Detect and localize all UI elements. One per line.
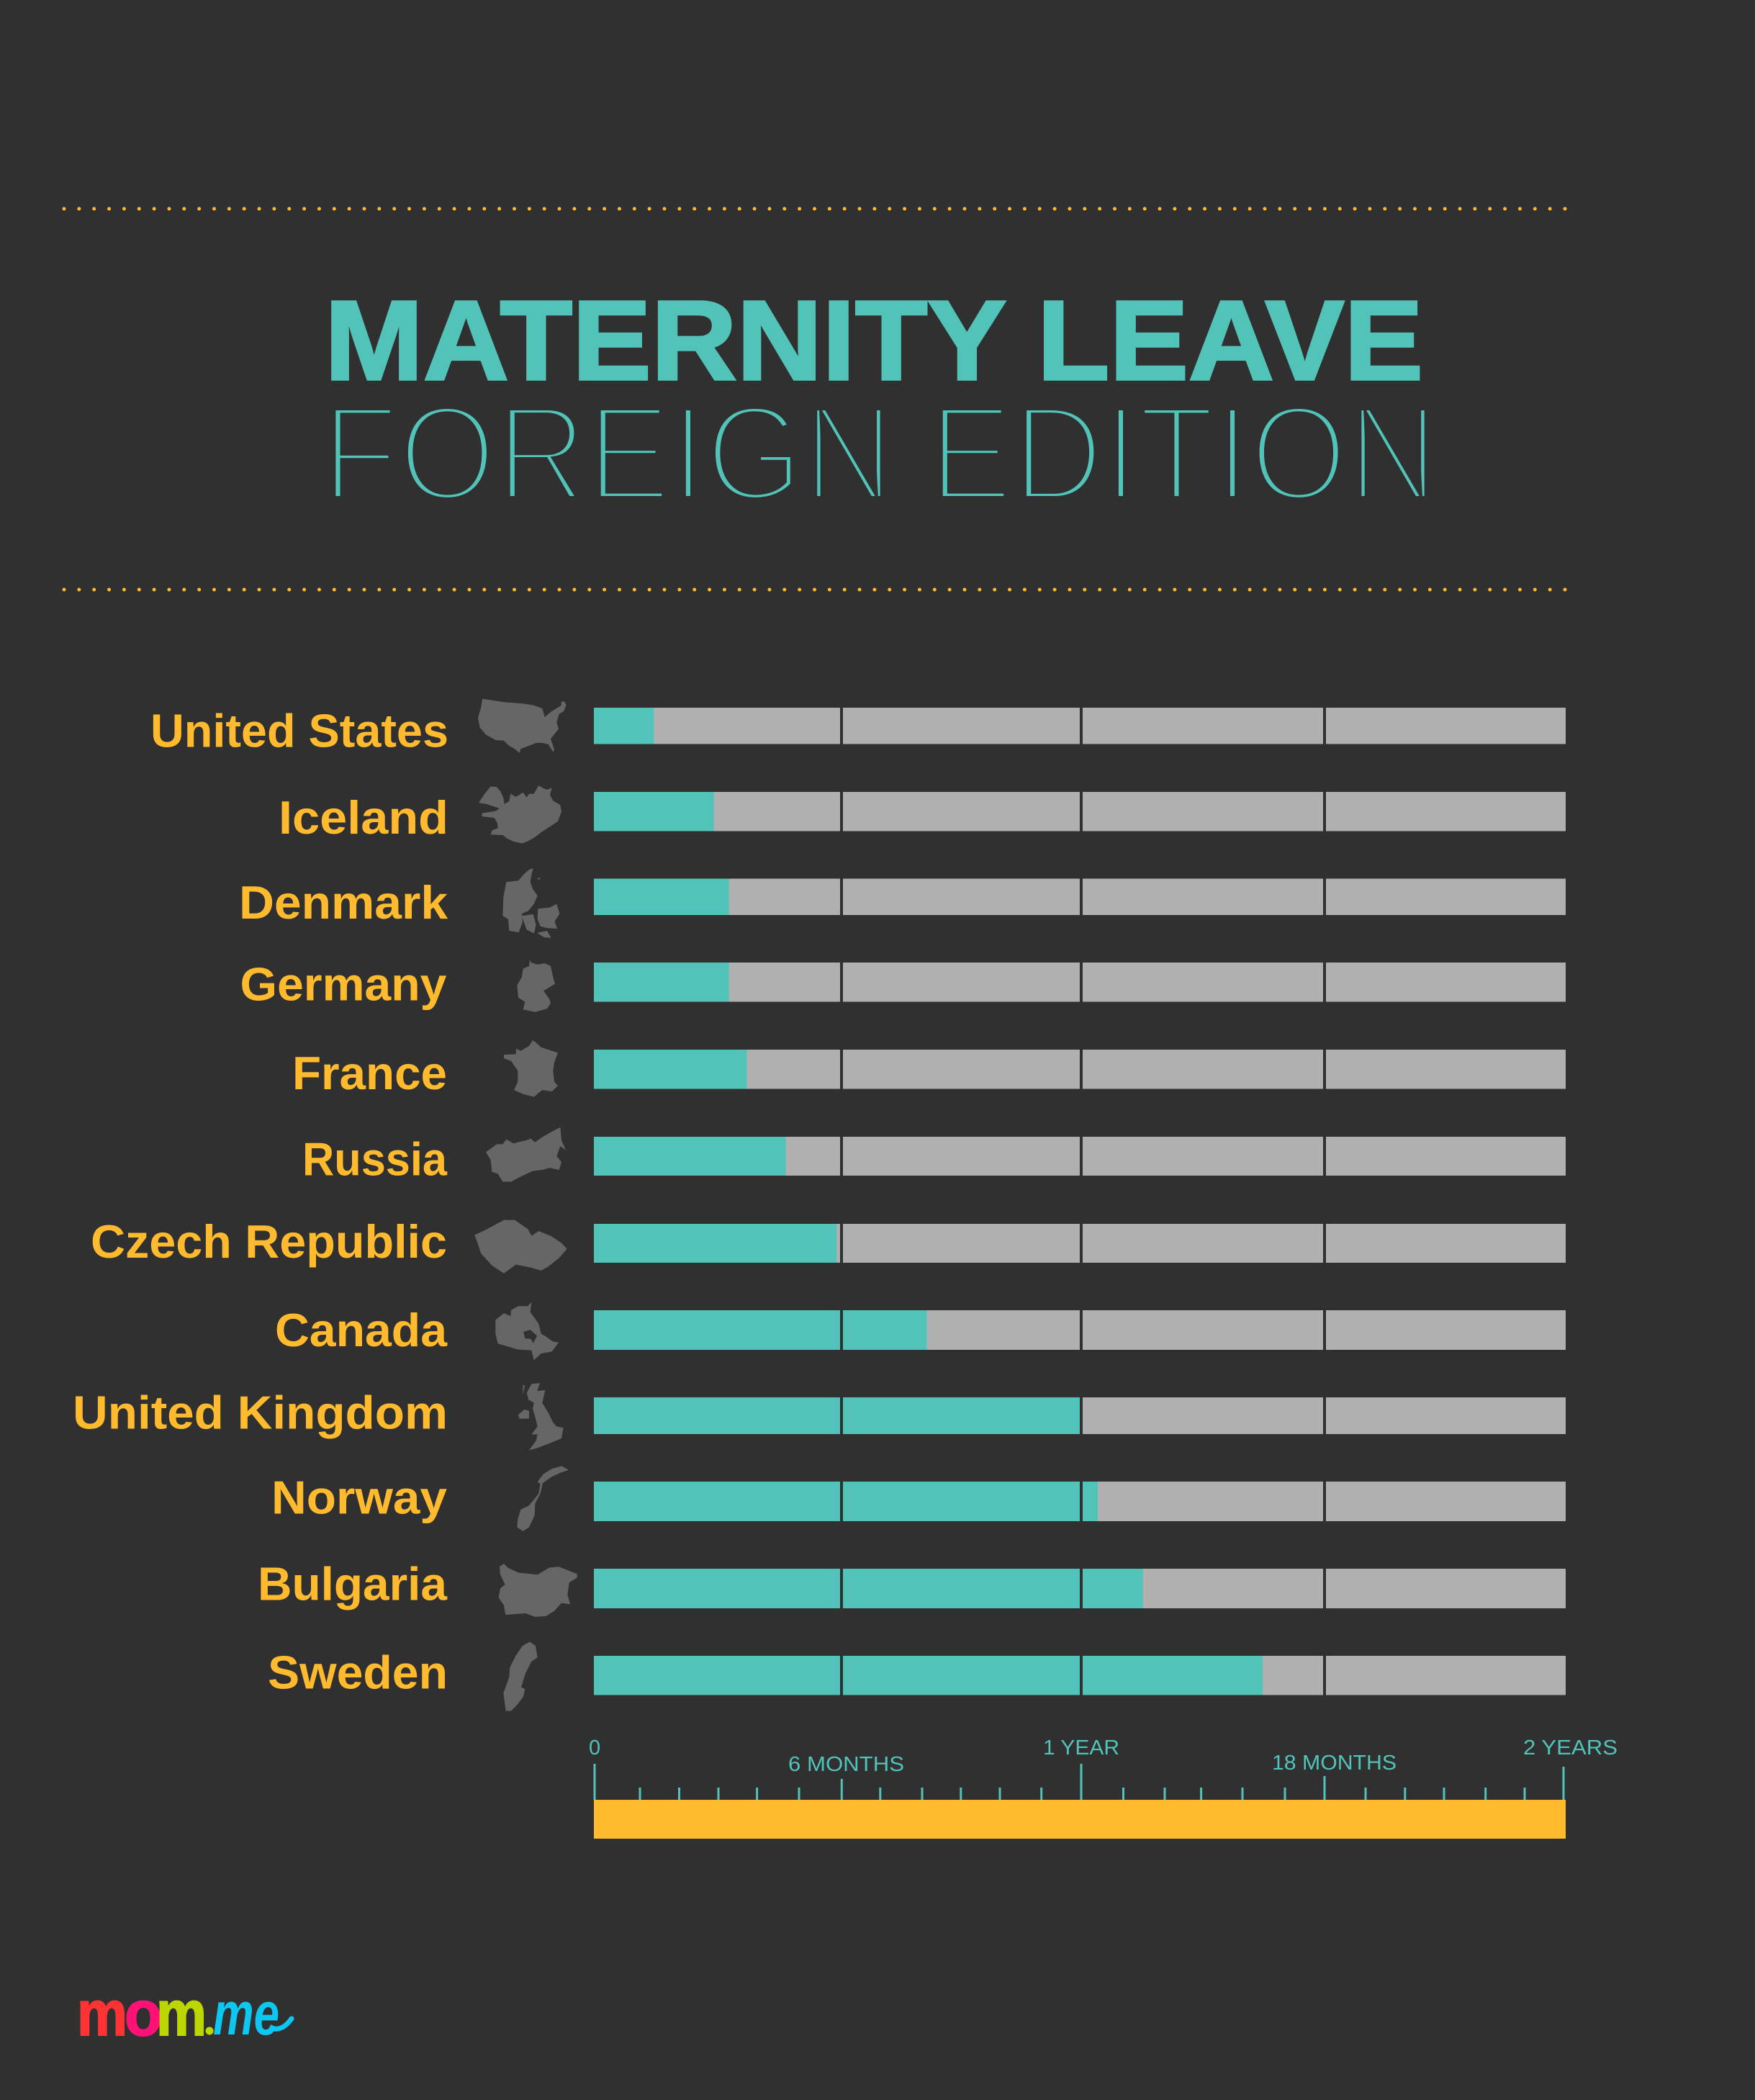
icon: Czech Republic map (474, 1220, 567, 1274)
bar: United Kingdom (594, 1397, 1566, 1434)
bar: Czech Republic (594, 1224, 1566, 1263)
label: Canada: Canada (275, 1304, 448, 1356)
label: Sweden: Sweden (268, 1646, 448, 1699)
bar: Canada (594, 1310, 1566, 1350)
axis label: 2 years: 2 YEARS (1523, 1736, 1618, 1759)
bar: Denmark (594, 878, 1566, 915)
logo letter m: m (77, 1978, 127, 2049)
bar: United States (594, 708, 1566, 744)
row: Czech Republic (91, 1215, 1566, 1274)
row: Russia (302, 1127, 1566, 1185)
title (322, 278, 1438, 530)
icon: United Kingdom map (518, 1383, 564, 1450)
label: France: France (292, 1047, 447, 1099)
axis label: 1 year: 1 YEAR (1043, 1736, 1119, 1759)
bar: Norway (594, 1482, 1566, 1521)
bar: Russia (594, 1137, 1566, 1176)
icon: Russia map (486, 1127, 566, 1181)
icon: Bulgaria map (499, 1564, 577, 1617)
row: Canada (275, 1302, 1566, 1360)
bar: Bulgaria (594, 1569, 1566, 1608)
row: United States (150, 699, 1566, 757)
bar: France (594, 1050, 1566, 1089)
icon: Germany map (517, 960, 555, 1012)
label: Denmark: Denmark (239, 876, 448, 929)
title line: Foreign Edition: FOREIGN EDITION (322, 377, 1438, 530)
label: Germany: Germany (240, 957, 446, 1011)
logo dot (206, 2027, 213, 2034)
label: Norway: Norway (271, 1472, 447, 1523)
timeline axis (589, 1736, 1618, 1839)
bar: Sweden (594, 1656, 1566, 1695)
logo script me: me (213, 1980, 279, 2047)
icon: Norway map (517, 1466, 569, 1531)
icon: Sweden map (503, 1641, 538, 1711)
axis label: 6 months: 6 MONTHS (788, 1753, 904, 1776)
logo letter o: o (125, 1978, 162, 2049)
label: Bulgaria: Bulgaria (258, 1558, 448, 1610)
icon: United States map (478, 699, 567, 753)
label: Iceland: Iceland (279, 791, 448, 844)
row: Germany (240, 957, 1566, 1012)
icon: France map (504, 1040, 558, 1097)
row: Norway (271, 1466, 1566, 1531)
icon: Canada map (495, 1302, 559, 1360)
row: Sweden (268, 1641, 1566, 1711)
label: Czech Republic: Czech Republic (91, 1215, 447, 1268)
logo: mom.me (77, 1978, 292, 2049)
axis bar (594, 1800, 1566, 1839)
logo letter m: m (156, 1978, 207, 2049)
row: Denmark (239, 868, 1566, 938)
icon: Iceland map (479, 785, 561, 844)
label: United States: United States (150, 704, 448, 757)
logo tail (274, 2019, 292, 2029)
icon: Denmark map (502, 868, 559, 938)
bar: Germany (594, 963, 1566, 1002)
axis ticks (595, 1764, 1564, 1800)
axis label: 18 months: 18 MONTHS (1272, 1752, 1397, 1775)
axis label: 0: 0 (589, 1736, 600, 1759)
label: Russia: Russia (302, 1133, 448, 1185)
label: United Kingdom: United Kingdom (73, 1387, 448, 1438)
row: France (292, 1040, 1566, 1099)
row: Iceland (279, 785, 1566, 844)
bar: Iceland (594, 792, 1566, 831)
row: Bulgaria (258, 1558, 1566, 1617)
title line: Maternity Leave: MATERNITY LEAVE (325, 278, 1423, 404)
row: United Kingdom (73, 1383, 1566, 1450)
